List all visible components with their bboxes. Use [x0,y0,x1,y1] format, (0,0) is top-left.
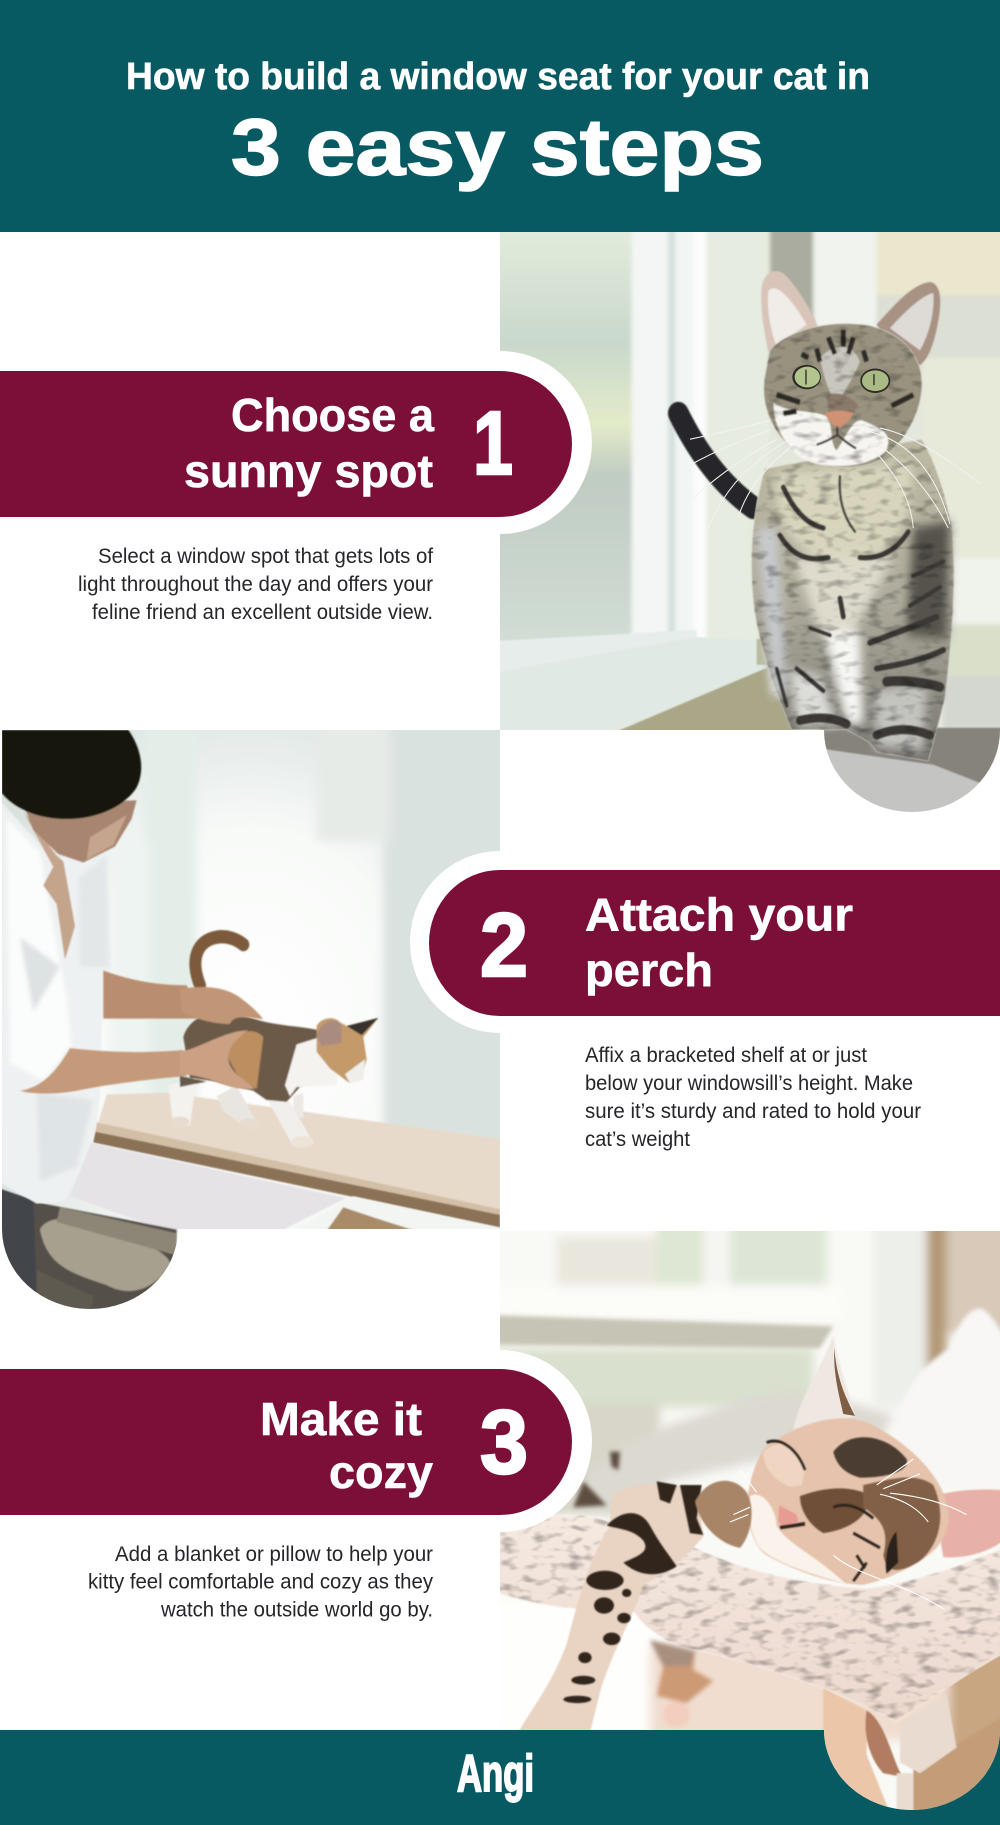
fleece perch [487,1515,1000,1722]
title: 3 easy steps [231,102,764,192]
shirt shading [7,819,108,1181]
photo: woman placing a kitten on a shelf [0,715,517,1322]
header band [0,0,1000,232]
step 2 heading [585,888,853,996]
footer band [0,1730,1000,1825]
step 3 heading [260,1393,433,1498]
step 2 description: below your windowsill’s height. Make [585,1072,913,1095]
whiskers [690,421,980,528]
step 1 description: Select a window spot that gets lots of [98,545,433,568]
front leg [518,1484,703,1733]
ear left [793,1335,855,1430]
hair [2,730,141,819]
cat tail [678,413,753,508]
kitten [168,1014,378,1148]
step 1 heading [184,389,434,497]
step 2 number: 2 [480,896,528,996]
step 3 description: watch the outside world go by. [160,1598,433,1622]
step 2 description: sure it’s sturdy and rated to hold your [585,1100,921,1123]
hind paw [650,1640,713,1727]
cat head [764,324,922,467]
step 1 description: light throughout the day and offers your [78,573,433,596]
woman's shirt [2,802,112,1204]
cat head and face markings [764,324,922,467]
head markings [749,1437,940,1585]
blurred cat spots [573,1452,620,1507]
arms [20,970,200,1094]
step 3 description: kitty feel comfortable and cozy as they [88,1570,433,1594]
step 3 description [88,1543,433,1622]
whiskers [730,1459,967,1609]
cat eyes [792,365,890,393]
kitten tail [195,937,243,985]
title [126,56,870,192]
second white cat [904,1306,1000,1404]
logo: Angi: Angi [457,1745,534,1803]
step 3 description: Add a blanket or pillow to help your [115,1543,433,1566]
step 2 description [585,1044,921,1151]
step 2 description: cat’s weight [585,1128,690,1151]
step 3 heading: Make it [260,1393,422,1445]
step 2 heading: Attach your [585,888,853,940]
hands [180,987,263,1089]
step 2 badge [410,851,1000,1033]
cat body [752,439,954,761]
step 1 description [78,545,433,624]
blob lower scene [820,727,1000,812]
step 3 badge [0,1350,592,1532]
neck and face [23,800,137,959]
cat nose and mouth [817,411,856,448]
cat paw [695,1481,752,1548]
chest fur [757,461,950,750]
step 1 description: feline friend an excellent outside view. [92,601,433,624]
curtain [112,730,500,1138]
blurred window background [487,1215,1000,1825]
window sill [497,630,793,735]
ear inner stripe [834,1348,855,1416]
cat stripes [777,476,943,735]
photo: tabby cat at a window [480,210,1000,824]
step 3 number: 3 [480,1393,528,1493]
step 1 badge [0,351,592,534]
photo: sleeping bengal cat on a perch [487,1215,1000,1825]
step 2 description: Affix a bracketed shelf at or just [585,1044,867,1067]
step 3 heading: cozy [329,1446,433,1498]
ear right [933,1490,1000,1557]
shelf board [93,1093,500,1228]
leg spots [563,1481,703,1703]
face markings [773,330,913,466]
blurred cat body [590,1400,894,1504]
cat body and markings [752,439,954,761]
window sill shadow [487,1315,833,1348]
step 2 heading: perch [585,944,713,996]
step 1 heading: Choose a [231,389,434,441]
cat head [747,1418,949,1585]
cushion and basket [0,1143,500,1322]
title: How to build a window seat for your cat in [126,56,870,98]
cat ears [761,271,940,365]
step 1 number: 1 [473,394,513,494]
step 1 heading: sunny spot [184,445,433,497]
fleece fringe [823,1688,1000,1821]
